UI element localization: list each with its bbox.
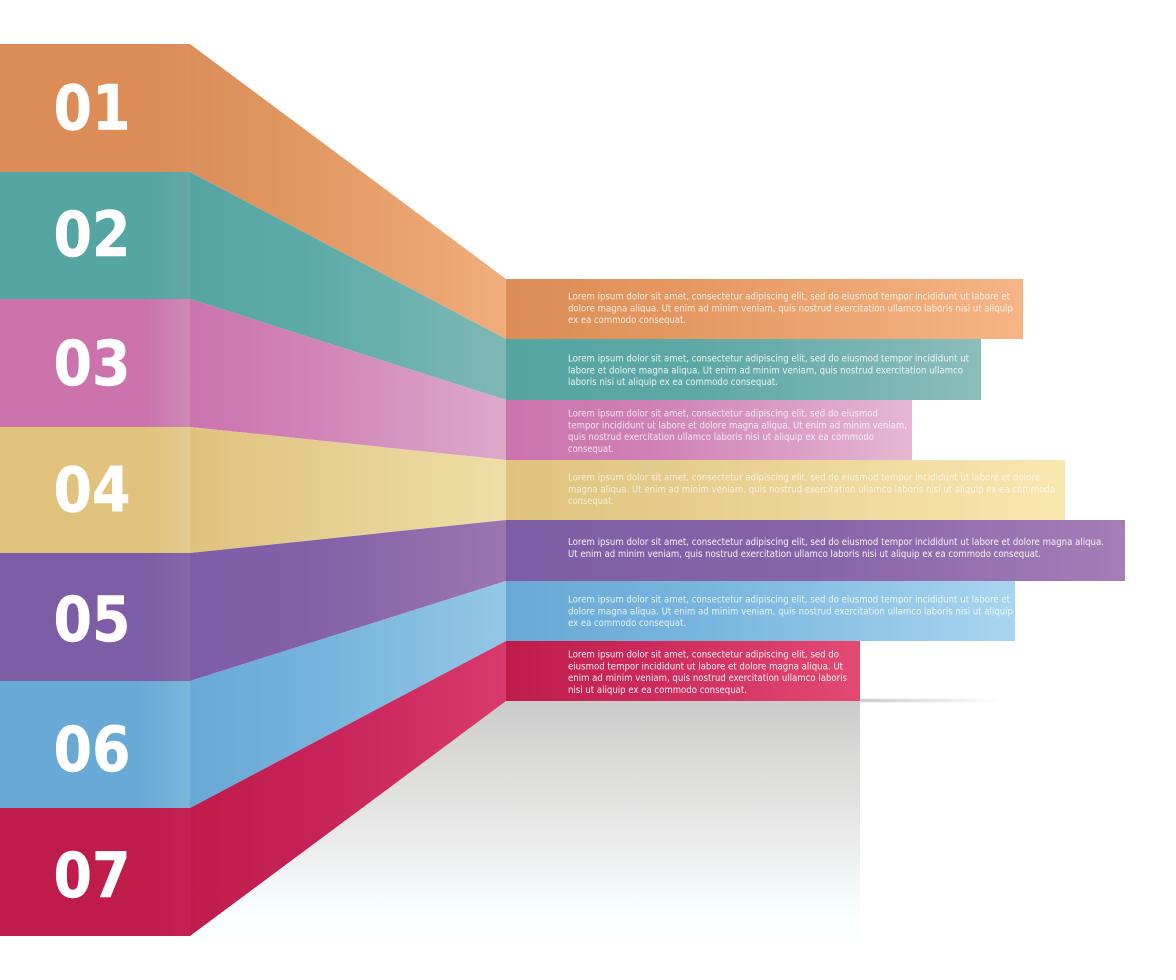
band 02 teal	[0, 172, 506, 400]
text bar 07	[506, 641, 860, 701]
band 05 purple	[0, 520, 506, 681]
text block 03: consequat.	[568, 444, 614, 455]
number 07: 07	[54, 839, 130, 912]
text block 04: consequat.	[568, 496, 614, 507]
text block 03: Lorem ipsum dolor sit amet, consectetur adipiscing elit, sed do eiusmod	[568, 408, 878, 420]
perspective wing 06	[190, 581, 506, 808]
text block 02	[568, 354, 969, 388]
number panel 05	[0, 553, 190, 681]
text block 05: Lorem ipsum dolor sit amet, consectetur adipiscing elit, sed do eiusmod tempor incididunt ut labore et dolore magna aliqua.	[568, 537, 1104, 548]
number panel 03	[0, 299, 190, 427]
text block 03: quis nostrud exercitation ullamco laboris nisi ut aliquip ex ea commodo	[568, 432, 874, 443]
text block 07: Lorem ipsum dolor sit amet, consectetur adipiscing elit, sed do	[568, 650, 839, 660]
text block 07: eiusmod tempor incididunt ut labore et dolore magna aliqua. Ut	[568, 661, 843, 672]
text block 04	[568, 472, 1055, 507]
text block 07: nisi ut aliquip ex ea commodo consequat.	[568, 685, 747, 696]
text bar 01	[506, 279, 1023, 339]
text block 01	[568, 292, 1013, 326]
band 07 red	[0, 641, 506, 936]
number panel 04	[0, 427, 190, 553]
number 02: 02	[54, 198, 130, 271]
text block 02: laboris nisi ut aliquip ex ea commodo consequat.	[568, 377, 778, 388]
number 05: 05	[54, 583, 130, 656]
text block 06: ex ea commodo consequat.	[568, 618, 686, 629]
perspective wing 04	[190, 427, 506, 553]
number 03: 03	[54, 327, 130, 400]
edge shadow	[860, 699, 1000, 702]
text block 07: enim ad minim veniam, quis nostrud exercitation ullamco laboris	[568, 673, 847, 684]
text block 06: Lorem ipsum dolor sit amet, consectetur adipiscing elit, sed do eiusmod tempor incididunt ut labore et	[568, 594, 1010, 606]
text block 01: dolore magna aliqua. Ut enim ad minim veniam, quis nostrud exercitation ullamco laboris nisi ut aliquip	[568, 303, 1013, 314]
perspective wing 07	[190, 641, 506, 936]
band 04 yellow	[0, 427, 506, 553]
band 03 pink	[0, 299, 506, 460]
text bar 05	[506, 520, 1125, 581]
text block 02: labore et dolore magna aliqua. Ut enim ad minim veniam, quis nostrud exercitation ullamco	[568, 365, 963, 376]
text block 05	[568, 537, 1104, 560]
text block 04: magna aliqua. Ut enim ad minim veniam, quis nostrud exercitation ullamco laboris nisi ut aliquip ex ea commodo	[568, 484, 1055, 495]
text bar 02	[506, 339, 981, 400]
text block 03: tempor incididunt ut labore et dolore magna aliqua. Ut enim ad minim veniam,	[568, 420, 907, 431]
perspective wing 05	[190, 520, 506, 681]
text bar 04	[506, 460, 1065, 520]
band 06 blue	[0, 581, 506, 808]
text block 07	[568, 650, 847, 696]
text block 01: Lorem ipsum dolor sit amet, consectetur adipiscing elit, sed do eiusmod tempor incididunt ut labore et	[568, 292, 1010, 302]
perspective wing 03	[190, 299, 506, 460]
text block 06	[568, 594, 1013, 629]
perspective wing 02	[190, 172, 506, 400]
number 04: 04	[54, 454, 130, 526]
text block 03	[568, 408, 907, 455]
text bar 06	[506, 581, 1015, 641]
perspective wing 01	[190, 44, 506, 339]
number panel 07	[0, 808, 190, 936]
number panel 06	[0, 681, 190, 808]
number 01: 01	[54, 72, 130, 144]
text bar 03	[506, 400, 912, 460]
number 06: 06	[54, 713, 130, 786]
text block 04: Lorem ipsum dolor sit amet, consectetur adipiscing elit, sed do eiusmod tempor incididunt ut labore et dolore	[568, 472, 1040, 484]
text block 06: dolore magna aliqua. Ut enim ad minim veniam, quis nostrud exercitation ullamco laboris nisi ut aliquip	[568, 606, 1013, 617]
text block 02: Lorem ipsum dolor sit amet, consectetur adipiscing elit, sed do eiusmod tempor incididunt ut	[568, 354, 969, 364]
text block 05: Ut enim ad minim veniam, quis nostrud exercitation ullamco laboris nisi ut aliquip ex ea commodo consequat.	[568, 549, 1041, 560]
number panel 02	[0, 172, 190, 299]
number panel 01	[0, 44, 190, 172]
text block 01: ex ea commodo consequat.	[568, 315, 686, 326]
band 01 orange	[0, 44, 506, 339]
floor shadow	[190, 701, 860, 940]
